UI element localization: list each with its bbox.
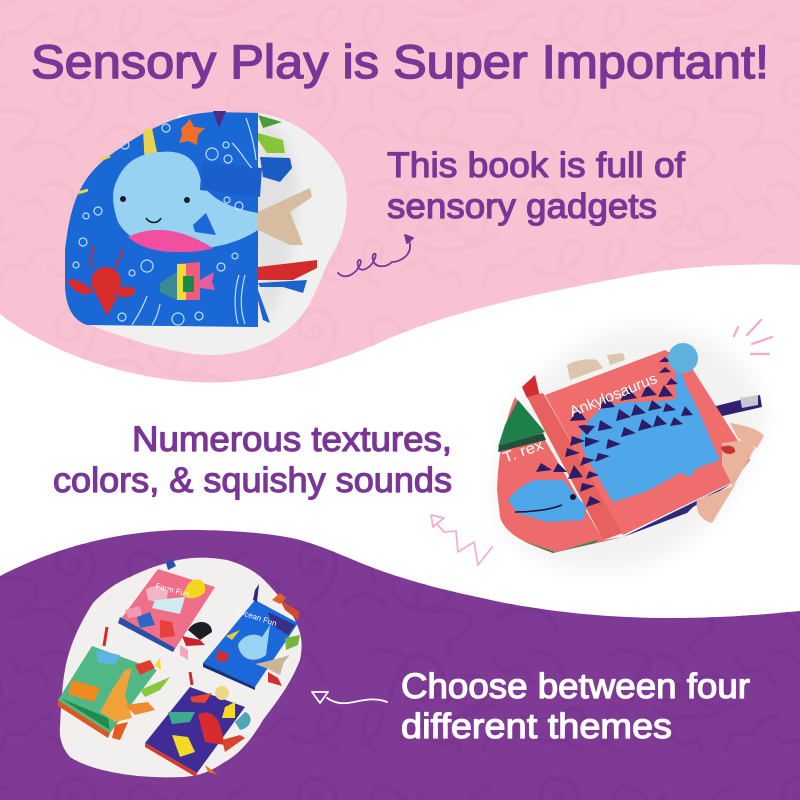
panel: pink top band	[0, 0, 800, 383]
book: ocean fun	[203, 584, 300, 690]
text block: sensory gadgets: This book is full of	[387, 146, 685, 185]
book: dinosaur fun	[145, 672, 251, 777]
photo: dinosaur book: T. rex	[501, 436, 546, 467]
photo: dinosaur book	[496, 327, 764, 570]
icon: pink spark lines	[734, 320, 772, 354]
icon: white arrow to books	[312, 692, 387, 703]
title: Sensory Play is Super Important!	[31, 35, 769, 88]
text block: sensory gadgets	[387, 146, 685, 226]
book: farm fun: Farm Fun	[154, 581, 190, 599]
text block: textures	[53, 420, 452, 500]
panel: purple bottom band	[0, 530, 800, 800]
hand	[730, 423, 764, 448]
book: jungle fun	[58, 627, 170, 740]
icon: pink zigzag arrow	[431, 515, 493, 565]
text block: themes: different themes	[401, 707, 672, 746]
icon: purple squiggle arrow	[338, 235, 413, 276]
book: ocean fun: Ocean Fun	[237, 607, 278, 628]
ribbon	[522, 375, 540, 398]
left page	[497, 397, 623, 553]
book: farm fun	[118, 558, 215, 660]
pompom	[668, 343, 698, 373]
text block: textures: colors, & squishy sounds	[53, 461, 452, 500]
right page	[623, 483, 733, 537]
text block: sensory gadgets: sensory gadgets	[387, 187, 657, 226]
photo: four themed books	[58, 558, 302, 777]
text block: themes: Choose between four	[401, 667, 750, 706]
text block: textures: Numerous textures,	[132, 420, 452, 459]
photo: narwhal sensory book	[65, 111, 347, 355]
photo: dinosaur book: Ankylosaurus	[567, 370, 660, 421]
text block: themes	[401, 667, 750, 746]
